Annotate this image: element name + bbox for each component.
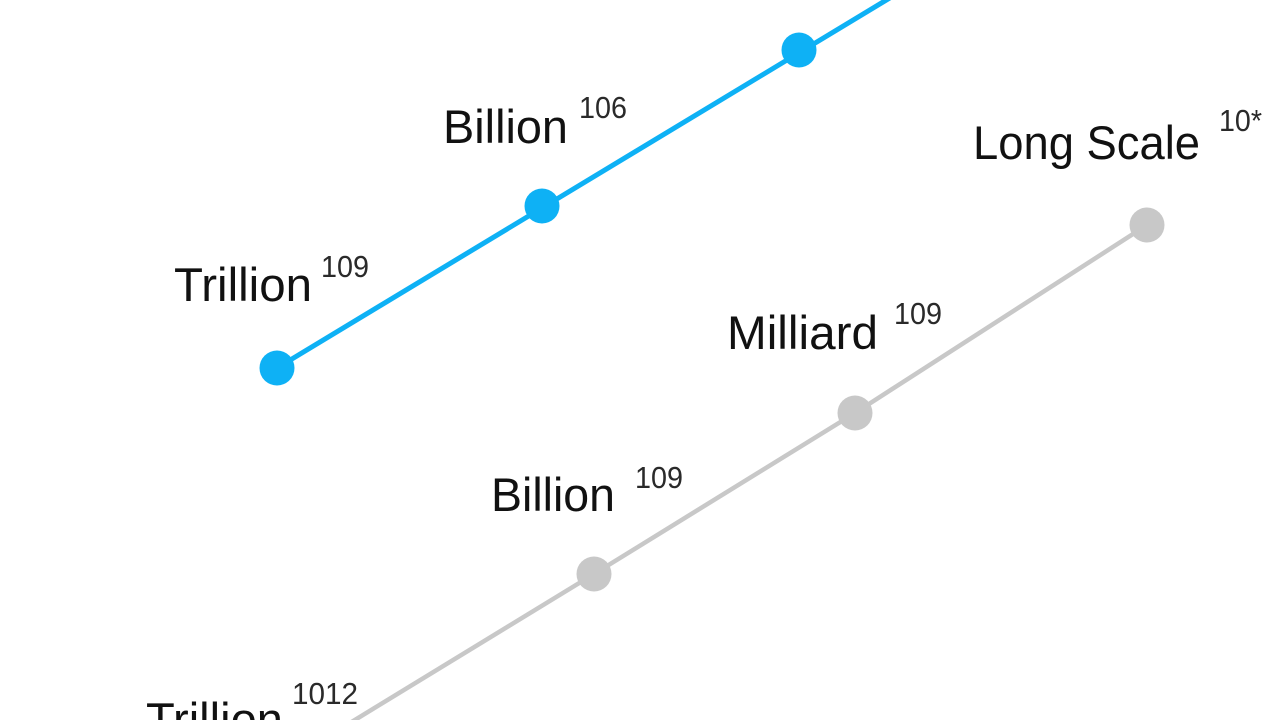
blue connecting line bbox=[277, 0, 893, 368]
blue short scale series bbox=[174, 0, 893, 386]
label: Billion: Billion bbox=[443, 100, 568, 153]
label: Trillion: Trillion bbox=[174, 258, 312, 311]
exponent: 1012: 1012 bbox=[292, 676, 358, 711]
label: Long Scale: Long Scale bbox=[973, 116, 1200, 169]
blue point: upper bbox=[782, 32, 816, 68]
gray connecting line bbox=[345, 225, 1147, 720]
gray long scale series bbox=[146, 103, 1262, 720]
exponent: 10*: 10* bbox=[1219, 103, 1262, 138]
blue point: trillion bbox=[260, 350, 294, 386]
exponent: 109: 109 bbox=[321, 249, 369, 284]
gray point: milliard bbox=[838, 396, 872, 430]
gray point: long scale bbox=[1130, 208, 1164, 242]
gray point: billion bbox=[576, 556, 612, 592]
exponent: 109: 109 bbox=[635, 460, 683, 495]
exponent: 109: 109 bbox=[894, 296, 942, 331]
blue point: billion bbox=[524, 188, 560, 224]
label: Milliard: Milliard bbox=[727, 306, 878, 359]
label: Billion: Billion bbox=[491, 468, 615, 521]
exponent: 106: 106 bbox=[579, 90, 627, 125]
